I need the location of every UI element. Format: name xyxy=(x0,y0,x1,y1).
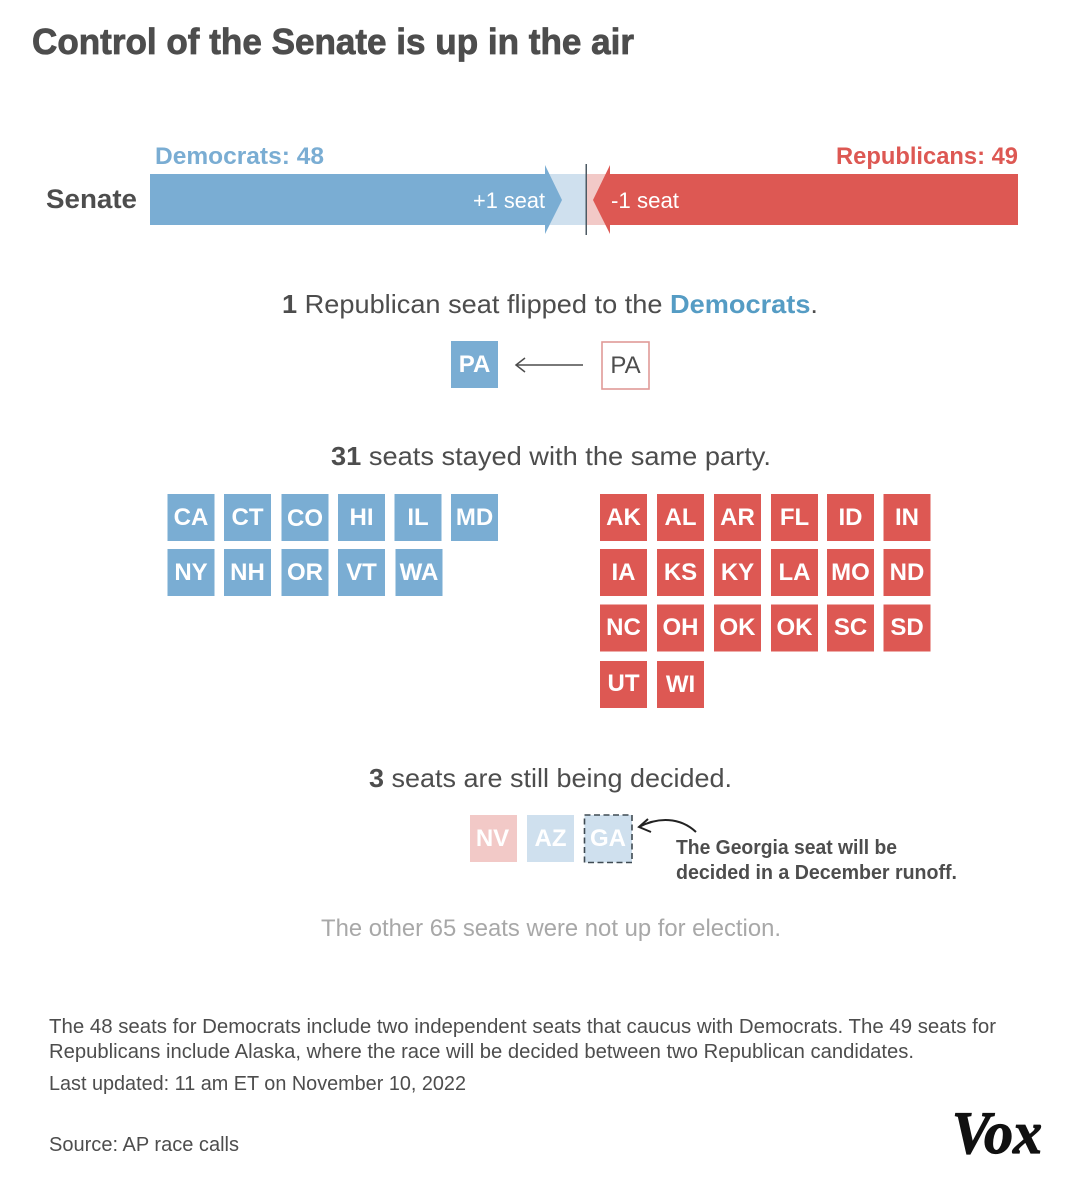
undecided seats xyxy=(470,815,632,862)
tile: PA Democrat: PA xyxy=(459,351,490,378)
panel: Republican held seats: AL xyxy=(664,504,696,531)
panel: Republican held seats: ND xyxy=(890,559,924,586)
source: Source: AP race calls xyxy=(49,1134,239,1156)
panel: Democratic held seats: WA xyxy=(400,559,438,586)
panel: Republican held seats: AR xyxy=(720,504,755,531)
panel: Republican held seats: WI xyxy=(666,671,695,698)
panel: Republican held seats: ID xyxy=(838,504,862,531)
tile: AZ: AZ xyxy=(534,825,566,852)
arrow: flip direction xyxy=(516,358,583,372)
tile: GA xyxy=(584,815,632,862)
callout: Georgia runoff xyxy=(676,836,957,884)
panel: senate bar xyxy=(46,143,1018,235)
panel: Republican held seats: SD xyxy=(890,614,924,641)
panel: Republican held seats: KY xyxy=(721,559,754,586)
panel: Democratic held seats: MD xyxy=(456,504,493,531)
panel: Republican held seats: IA xyxy=(612,559,636,586)
panel: Republican held seats: NC xyxy=(606,614,641,641)
flipped seat diagram xyxy=(451,341,649,389)
panel: Republican held seats: SC xyxy=(834,614,867,641)
panel: Republican held seats: OH xyxy=(662,614,698,641)
last updated: Last updated: 11 am ET on November 10, 2022 xyxy=(49,1073,466,1095)
panel: Republican held seats: MO xyxy=(831,559,870,586)
panel: Republican held seats: OK xyxy=(720,614,756,641)
footnote xyxy=(49,1016,996,1063)
label: Democrats 48: Democrats: 48 xyxy=(155,143,324,170)
arrow: Georgia callout xyxy=(639,819,696,832)
bar: pending red segment xyxy=(586,174,610,225)
tile: AZ xyxy=(527,815,574,862)
panel: Democratic held seats xyxy=(168,494,498,596)
footnote: The 48 seats for Democrats include two independent seats that caucus with Democrats. The 49 seats for xyxy=(49,1016,996,1038)
tile: GA: GA xyxy=(590,825,626,852)
panel: Democratic held seats: NY xyxy=(174,559,208,586)
label: minus one seat: -1 seat xyxy=(611,188,679,213)
tile: NV xyxy=(470,815,517,862)
panel: Republican held seats: LA xyxy=(778,559,810,586)
panel: Democratic held seats: NH xyxy=(230,559,265,586)
label: plus one seat: +1 seat xyxy=(473,188,545,213)
tile: PA Republican outline xyxy=(602,342,649,389)
label: Republicans 49: Republicans: 49 xyxy=(836,143,1018,170)
callout: Georgia runoff: The Georgia seat will be xyxy=(676,836,897,859)
panel: Republican held seats: OK xyxy=(776,614,813,641)
panel: Republican held seats: IN xyxy=(895,504,919,531)
note: seats not up for election: The other 65 seats were not up for election. xyxy=(321,915,781,942)
heading: same party: 31 seats stayed with the same party. xyxy=(331,441,771,471)
heading: still being decided: 3 seats are still being decided. xyxy=(369,763,732,793)
bar: Democrats arrow xyxy=(150,165,562,234)
logo: Vox: Vox xyxy=(952,1100,1042,1166)
panel: Democratic held seats: HI xyxy=(350,504,374,531)
tile: NV: NV xyxy=(476,825,509,852)
panel: Republican held seats xyxy=(600,494,930,708)
footnote: Republicans include Alaska, where the race will be decided between two Republican candidates. xyxy=(49,1041,914,1063)
divider line xyxy=(586,164,587,235)
panel: Democratic held seats: CA xyxy=(174,504,208,531)
callout: Georgia runoff: decided in a December runoff. xyxy=(676,861,957,884)
panel: Democratic held seats: OR xyxy=(287,559,323,586)
panel: Democratic held seats: CT xyxy=(232,504,264,531)
tile: PA Republican outline: PA xyxy=(610,352,641,379)
heading: flipped seat: 1 Republican seat flipped to the Democrats. xyxy=(282,289,818,319)
panel: Democratic held seats: CO xyxy=(287,505,323,532)
bar: Republicans arrow xyxy=(593,165,1018,234)
panel: Republican held seats: AK xyxy=(606,504,641,531)
tile: PA Democrat xyxy=(451,341,498,388)
panel: Republican held seats: UT xyxy=(608,670,640,697)
panel: Democratic held seats: VT xyxy=(346,559,377,586)
panel: Democratic held seats: IL xyxy=(407,504,429,531)
panel: Republican held seats: FL xyxy=(780,504,809,531)
title: Control of the Senate is up in the air xyxy=(32,21,634,62)
bar: pending blue segment xyxy=(545,174,586,225)
panel: Republican held seats: KS xyxy=(664,559,697,586)
label: Senate: Senate xyxy=(46,184,137,214)
